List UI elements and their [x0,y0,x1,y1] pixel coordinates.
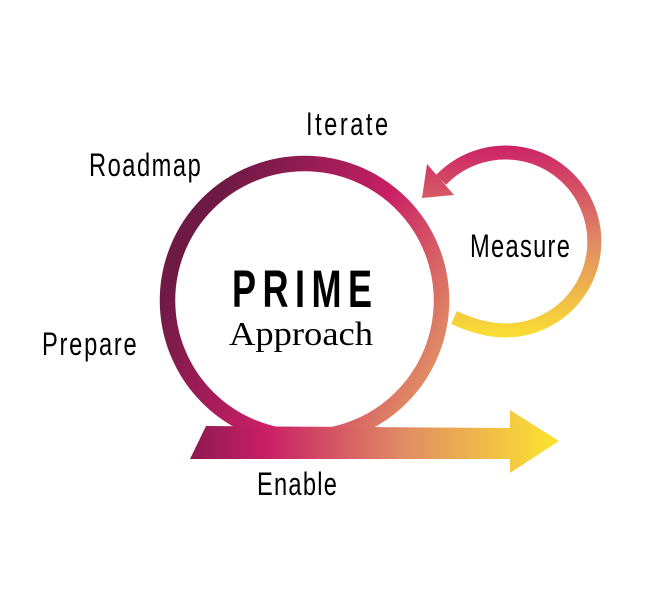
main ring [168,164,442,438]
title: PRIME: PRIME [232,259,372,319]
label: Enable: Enable [257,467,337,502]
label: Roadmap: Roadmap [89,148,201,183]
label: Prepare: Prepare [42,327,137,362]
label: Measure: Measure [470,229,570,264]
arrow: Measure feedback loop [422,153,594,330]
label: Iterate: Iterate [306,107,388,142]
subtitle: Approach: Approach [229,316,373,353]
arrow: Enable band [190,410,559,473]
